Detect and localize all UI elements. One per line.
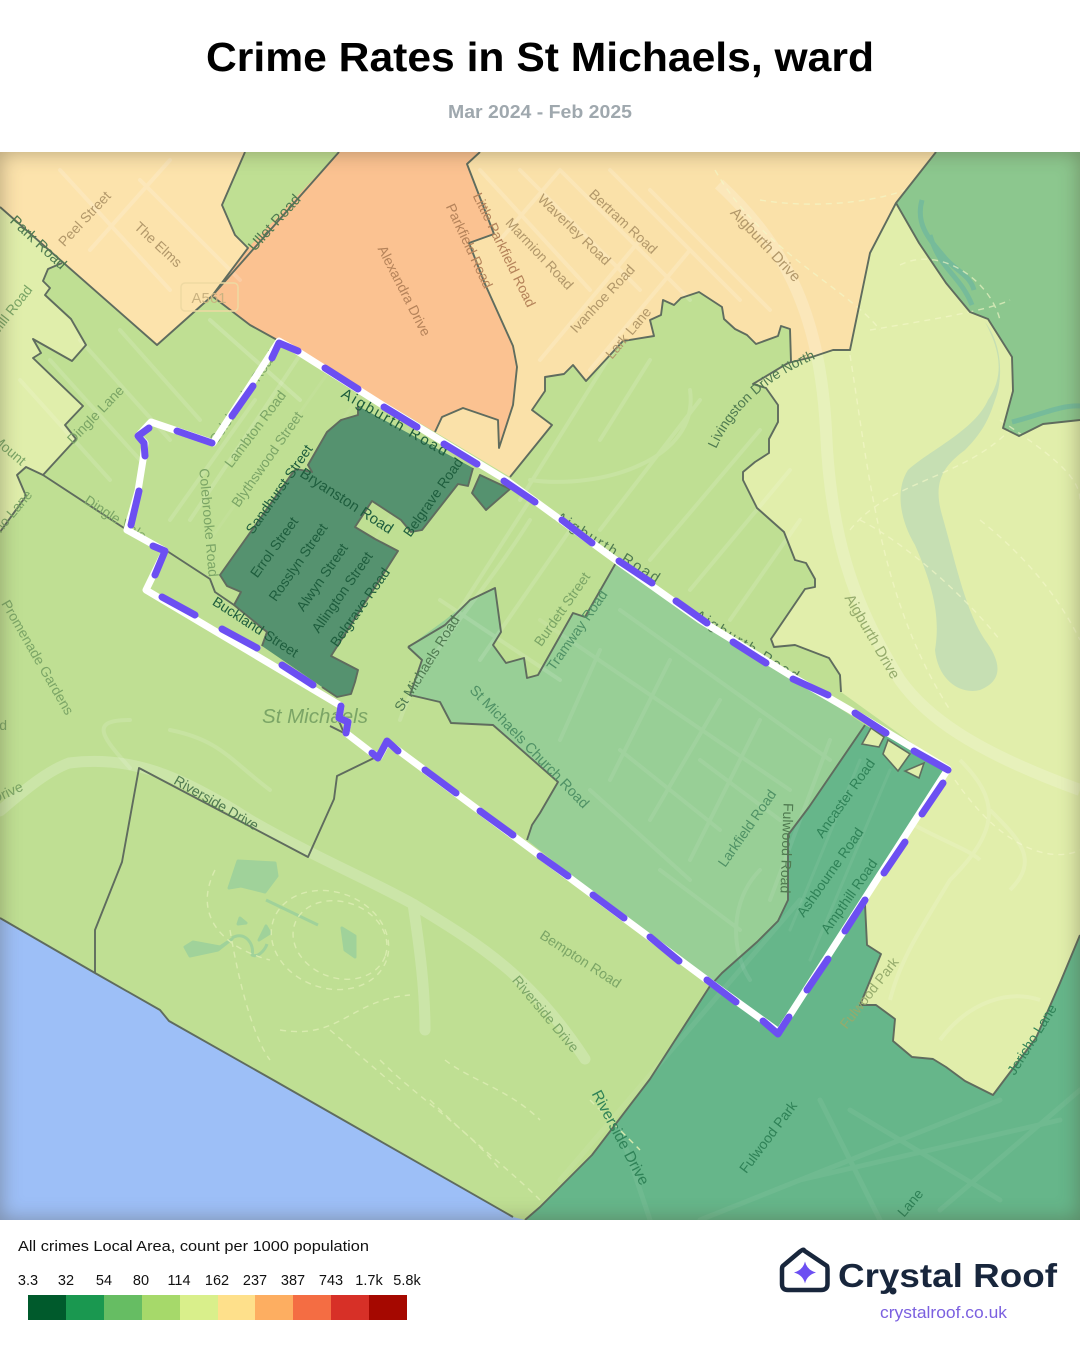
pale notches along Aigburth Road [862, 728, 924, 778]
legend scale values: 80 [133, 1273, 149, 1289]
logo: Crystal Roof [782, 1250, 1058, 1322]
road labels: Burdett Street [531, 569, 593, 649]
website URL: crystalroof.co.uk [880, 1304, 1008, 1322]
A561 road shield [181, 283, 238, 311]
St Michaels park dashed paths [207, 870, 640, 1200]
road labels: Alexandra Drive [375, 243, 434, 339]
road labels: Lark Lane [602, 304, 654, 362]
road labels: Colebrooke Road [206, 348, 280, 447]
road labels: Jericho Lane [1004, 1001, 1060, 1078]
legend scale values: 162 [205, 1273, 229, 1289]
road labels: Promenade Gardens [0, 597, 77, 718]
area: orange highest crime [213, 152, 517, 448]
legend [18, 1239, 421, 1320]
road labels: Bempton Road [537, 927, 624, 991]
north-east park water [920, 200, 1080, 422]
road labels: Belgrave Road [327, 565, 393, 650]
road labels: Dingle Lane [64, 382, 127, 447]
road labels: Blythswood Street [228, 408, 306, 510]
road labels: Larkfield Road [714, 787, 779, 870]
road labels: Ampthill Road [817, 856, 880, 936]
road labels: Errol Street [247, 514, 301, 580]
road labels: Rosslyn Street [265, 520, 331, 604]
choropleth map [0, 152, 1080, 1220]
area: green south-east [525, 725, 1080, 1220]
road labels: St Michaels Church Road [466, 683, 592, 812]
road labels: Aigburth Road [552, 509, 665, 588]
road labels: St Michaels [262, 705, 368, 728]
road labels: Marmion Road [502, 215, 577, 293]
Sefton Park light road and paths [715, 170, 1080, 1040]
legend scale values: 114 [167, 1273, 191, 1289]
base area: light green crime band [0, 152, 1080, 1220]
icon: house with star [782, 1250, 828, 1290]
area: dark green low-crime streets [220, 406, 473, 697]
road labels: Allington Street [308, 549, 376, 636]
road labels: Riverside Drive [171, 772, 262, 833]
road labels: Fulwood Park [736, 1097, 801, 1176]
area: dark green triangle [472, 475, 510, 510]
legend scale values: 54 [96, 1273, 112, 1289]
road labels: Dingle Vale [82, 492, 150, 544]
road labels: Peel Street [55, 188, 114, 249]
header [206, 34, 874, 122]
road labels: Aigburth Road [691, 607, 804, 686]
road labels [0, 186, 1060, 1220]
footer [18, 1239, 1058, 1322]
legend scale values [18, 1273, 421, 1289]
road labels: Little Parkfield Road [470, 190, 539, 310]
road labels: Ullet Road [245, 191, 304, 255]
road labels: Ivanhoe Road [567, 261, 638, 336]
road labels: St Michaels Road [391, 613, 463, 714]
legend scale values: 237 [243, 1273, 267, 1289]
area: pale green western edge [0, 207, 86, 532]
road labels: Aigburth Drive [727, 204, 804, 285]
road labels: Lambton Road [221, 388, 289, 470]
legend scale values: 3.3 [18, 1273, 38, 1289]
road labels: Riverside Drive [509, 972, 583, 1055]
area: darker green north-east park [896, 152, 1080, 436]
legend scale values: 387 [281, 1273, 305, 1289]
road labels: Bryanston Road [297, 465, 396, 538]
road labels: Parkfield Road [443, 201, 496, 291]
road labels: Ashbourne Road [793, 825, 867, 920]
legend scale values: 743 [319, 1273, 343, 1289]
ward boundary: St Michaels [127, 341, 948, 1034]
area: mid green Ward south-east section [408, 561, 865, 986]
road labels: Tramway Road [543, 587, 611, 673]
road labels: Colebrooke Road [196, 468, 222, 578]
road labels: Sandhurst Street [242, 441, 316, 537]
road labels: Buckland Street [210, 593, 302, 660]
area: pale green Sefton Park [743, 203, 1080, 1095]
road labels: Ancaster Road [812, 756, 878, 841]
local roads overlay [0, 160, 1080, 1220]
sea: Mersey water [0, 918, 525, 1220]
park ponds [185, 861, 355, 957]
road labels: Park Road [6, 212, 70, 273]
road labels: Aigburth Drive [841, 591, 903, 682]
subtitle: date range: Mar 2024 - Feb 2025 [448, 102, 632, 122]
ward boundaries [0, 152, 1080, 1220]
area: peach north-west [0, 152, 248, 345]
wordmark: Crystal Roof [838, 1257, 1058, 1294]
road labels: Alwyn Street [293, 540, 351, 614]
legend colour bar [28, 1295, 407, 1320]
road labels: Fulwood Park [836, 953, 902, 1032]
road labels: Belgrave Road [400, 455, 466, 540]
map edge vignette [0, 152, 1080, 1220]
legend scale values: 1.7k [355, 1273, 383, 1289]
road labels: Aigburth Road [338, 385, 452, 461]
road labels: Waverley Road [535, 191, 614, 268]
legend title: All crimes Local Area, count per 1000 population [18, 1239, 369, 1255]
legend scale values: 5.8k [393, 1273, 421, 1289]
road labels: Riverside Drive [588, 1088, 652, 1188]
road labels: The Elms [131, 218, 185, 270]
area: peach north-east [435, 152, 936, 477]
road labels: Fulwood Road [777, 803, 797, 894]
legend scale values: 32 [58, 1273, 74, 1289]
road labels: Lane [894, 1186, 926, 1220]
A561 road shield: A561 [191, 290, 227, 307]
park lake [901, 322, 1000, 691]
title: Crime Rates in St Michaels, ward [206, 34, 874, 80]
road labels: Livingston Drive North [708, 352, 815, 448]
road labels: Bertram Road [586, 186, 661, 257]
